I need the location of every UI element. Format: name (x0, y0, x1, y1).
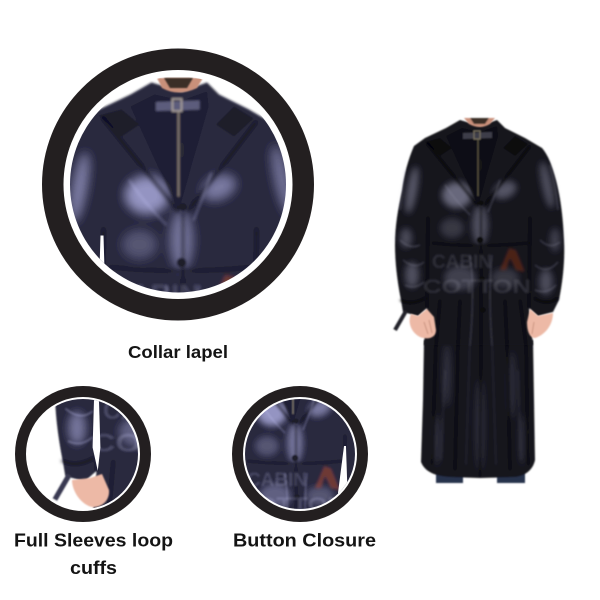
collar photo crop (70, 77, 286, 292)
skirt sheen (434, 343, 525, 471)
full-length leather coat figure (395, 118, 564, 483)
collar strap and buckle (463, 132, 492, 139)
neck and beard (464, 118, 495, 127)
dark lapels and inner jacket (446, 126, 498, 206)
fold lines (400, 143, 558, 345)
label: collar lapel: Collar lapel (128, 342, 228, 362)
button photo crop (245, 399, 355, 509)
trousers under hem (436, 474, 525, 483)
sheen (400, 151, 560, 295)
cuff photo crop (52, 399, 138, 508)
label: full sleeves loop cuffs: cuffs (70, 557, 117, 578)
faint watermark: CABIN (432, 252, 492, 273)
large detail circle: collar lapel (42, 48, 314, 320)
right hand (527, 309, 553, 338)
faint watermark: COTTON (423, 277, 531, 298)
coat buttons (478, 200, 484, 206)
hand in cuff crop (72, 474, 109, 507)
black ring (238, 392, 362, 516)
label: button closure: Button Closure (233, 530, 376, 550)
left hand (410, 309, 436, 338)
looped cuff strap (395, 311, 406, 330)
small detail circle: cuffs (15, 386, 151, 522)
label: full sleeves loop cuffs (14, 530, 173, 578)
small detail circle: button closure (232, 386, 368, 522)
label: full sleeves loop cuffs: Full Sleeves loop (14, 530, 173, 550)
zipper (477, 136, 479, 196)
black ring (53, 59, 303, 310)
coat silhouette (395, 120, 564, 345)
faint watermark (423, 252, 531, 298)
coat skirt (421, 340, 535, 478)
black ring (20, 392, 146, 516)
